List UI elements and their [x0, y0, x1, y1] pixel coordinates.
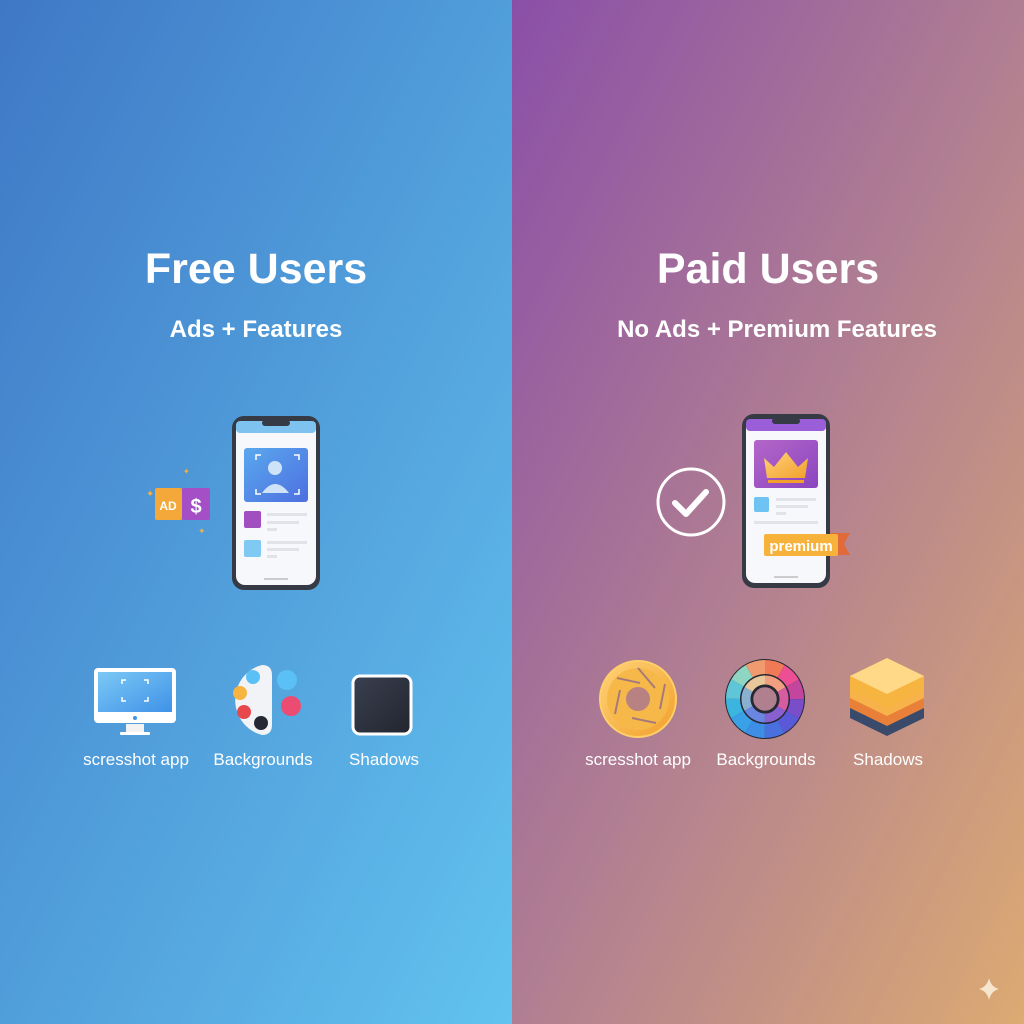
- icon: color wheel: [725, 659, 805, 739]
- icon: ad tag: AD: [159, 499, 177, 513]
- subtitle: No Ads + Premium Features: No Ads + Premium Features: [617, 316, 937, 343]
- title: Paid Users: Paid Users: [657, 245, 879, 293]
- feature: screenshot app (paid): [585, 661, 691, 769]
- panel: paid users background: [512, 0, 1024, 1024]
- icon: layered stack: [850, 658, 924, 736]
- icon: ad tag: $: [190, 496, 202, 518]
- feature: shadows (paid): [850, 658, 924, 769]
- feature: shadows (free): [349, 676, 419, 769]
- badge: premium: [764, 533, 850, 556]
- phone: free: [232, 416, 320, 590]
- feature: screenshot app (paid): scresshot app: [585, 750, 691, 769]
- screen card: crown: [754, 440, 818, 488]
- icon: shutter: [600, 661, 676, 737]
- feature: shadows (paid): Shadows: [853, 750, 923, 769]
- feature: screenshot app (free): [83, 668, 189, 769]
- feature: backgrounds (paid): [716, 659, 816, 769]
- feature: screenshot app (free): scresshot app: [83, 750, 189, 769]
- icon: sparkle: [979, 978, 999, 1000]
- feature: backgrounds (free): Backgrounds: [213, 750, 313, 769]
- feature: shadows (free): Shadows: [349, 750, 419, 769]
- title: Free Users: Free Users: [145, 245, 367, 293]
- badge: premium: premium: [769, 538, 833, 555]
- screen card: profile: [244, 448, 308, 502]
- icon: ad tag: [146, 467, 210, 536]
- icon: dark square: [353, 676, 411, 734]
- icon: palette: [233, 665, 301, 735]
- phone: paid: [742, 414, 830, 588]
- icon: ad tag: ✦: [146, 489, 154, 500]
- feature: backgrounds (free): [213, 665, 313, 769]
- icon: ad tag: ✦: [183, 467, 190, 476]
- feature: backgrounds (paid): Backgrounds: [716, 750, 816, 769]
- subtitle: Ads + Features: Ads + Features: [170, 316, 342, 343]
- icon: ad tag: ✦: [198, 526, 206, 536]
- icon: check circle: [658, 469, 724, 535]
- panel: free users background: [0, 0, 512, 1024]
- icon: monitor: [94, 668, 176, 735]
